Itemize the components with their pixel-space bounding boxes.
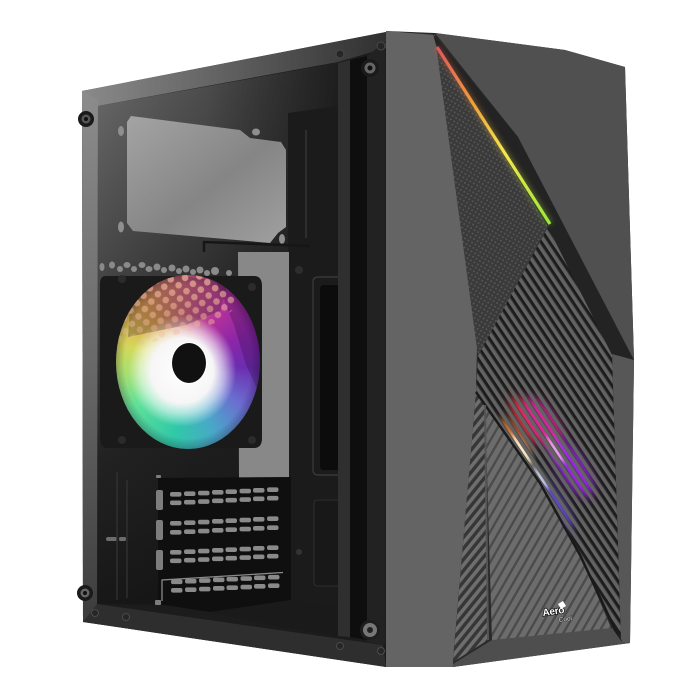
logo: AeroCool (542, 601, 573, 624)
louver divider (476, 392, 621, 642)
front panel: lower right louvers (485, 405, 612, 641)
front panel: base silhouette (386, 31, 634, 667)
fan hex grille (118, 275, 260, 388)
fan centre white glow (116, 275, 260, 449)
lower louver groove (485, 405, 488, 640)
front panel: right lower strip (612, 354, 634, 643)
thumb slider (106, 537, 126, 541)
front panel: upper louver recess (476, 227, 621, 642)
PSU cover plate (127, 116, 286, 243)
side window: glass panel frame (82, 32, 386, 667)
floor of chassis (210, 600, 338, 636)
expansion slot bracket area (106, 472, 291, 612)
front panel: dark wedge (433, 34, 634, 360)
vent holes above fan (100, 262, 232, 276)
RGB fan (116, 275, 260, 449)
front panel: left strip (386, 31, 477, 667)
illustration: PC case (77, 31, 634, 667)
PSU mount holes (118, 126, 285, 244)
bottom frame (83, 604, 386, 667)
logo: AeroCool: Cool (558, 615, 573, 624)
logo: AeroCool: Aero (542, 605, 565, 619)
front panel: lower left louvers (453, 392, 488, 662)
top frame (82, 32, 386, 108)
window interior (97, 63, 338, 606)
front panel: mesh section (436, 45, 548, 356)
RGB light bar (437, 47, 550, 224)
frame rivets (92, 42, 385, 654)
slot tabs (155, 475, 163, 605)
fan hub (171, 342, 207, 384)
fan rim shading (116, 275, 260, 449)
left frame (82, 91, 98, 622)
front panel: top right plate (435, 33, 634, 360)
RGB glow behind louvers (491, 391, 601, 535)
motherboard cutout (238, 252, 289, 478)
front panel: upper louver blades (476, 227, 621, 642)
vent slots (170, 487, 280, 593)
interior right shading (97, 63, 338, 606)
thumb screws (77, 59, 380, 640)
bracket line (162, 572, 283, 601)
fan frame (100, 275, 262, 448)
front panel: bottom lip (453, 628, 630, 667)
right pillars of chassis (288, 42, 385, 645)
motherboard tray bar (204, 242, 310, 252)
